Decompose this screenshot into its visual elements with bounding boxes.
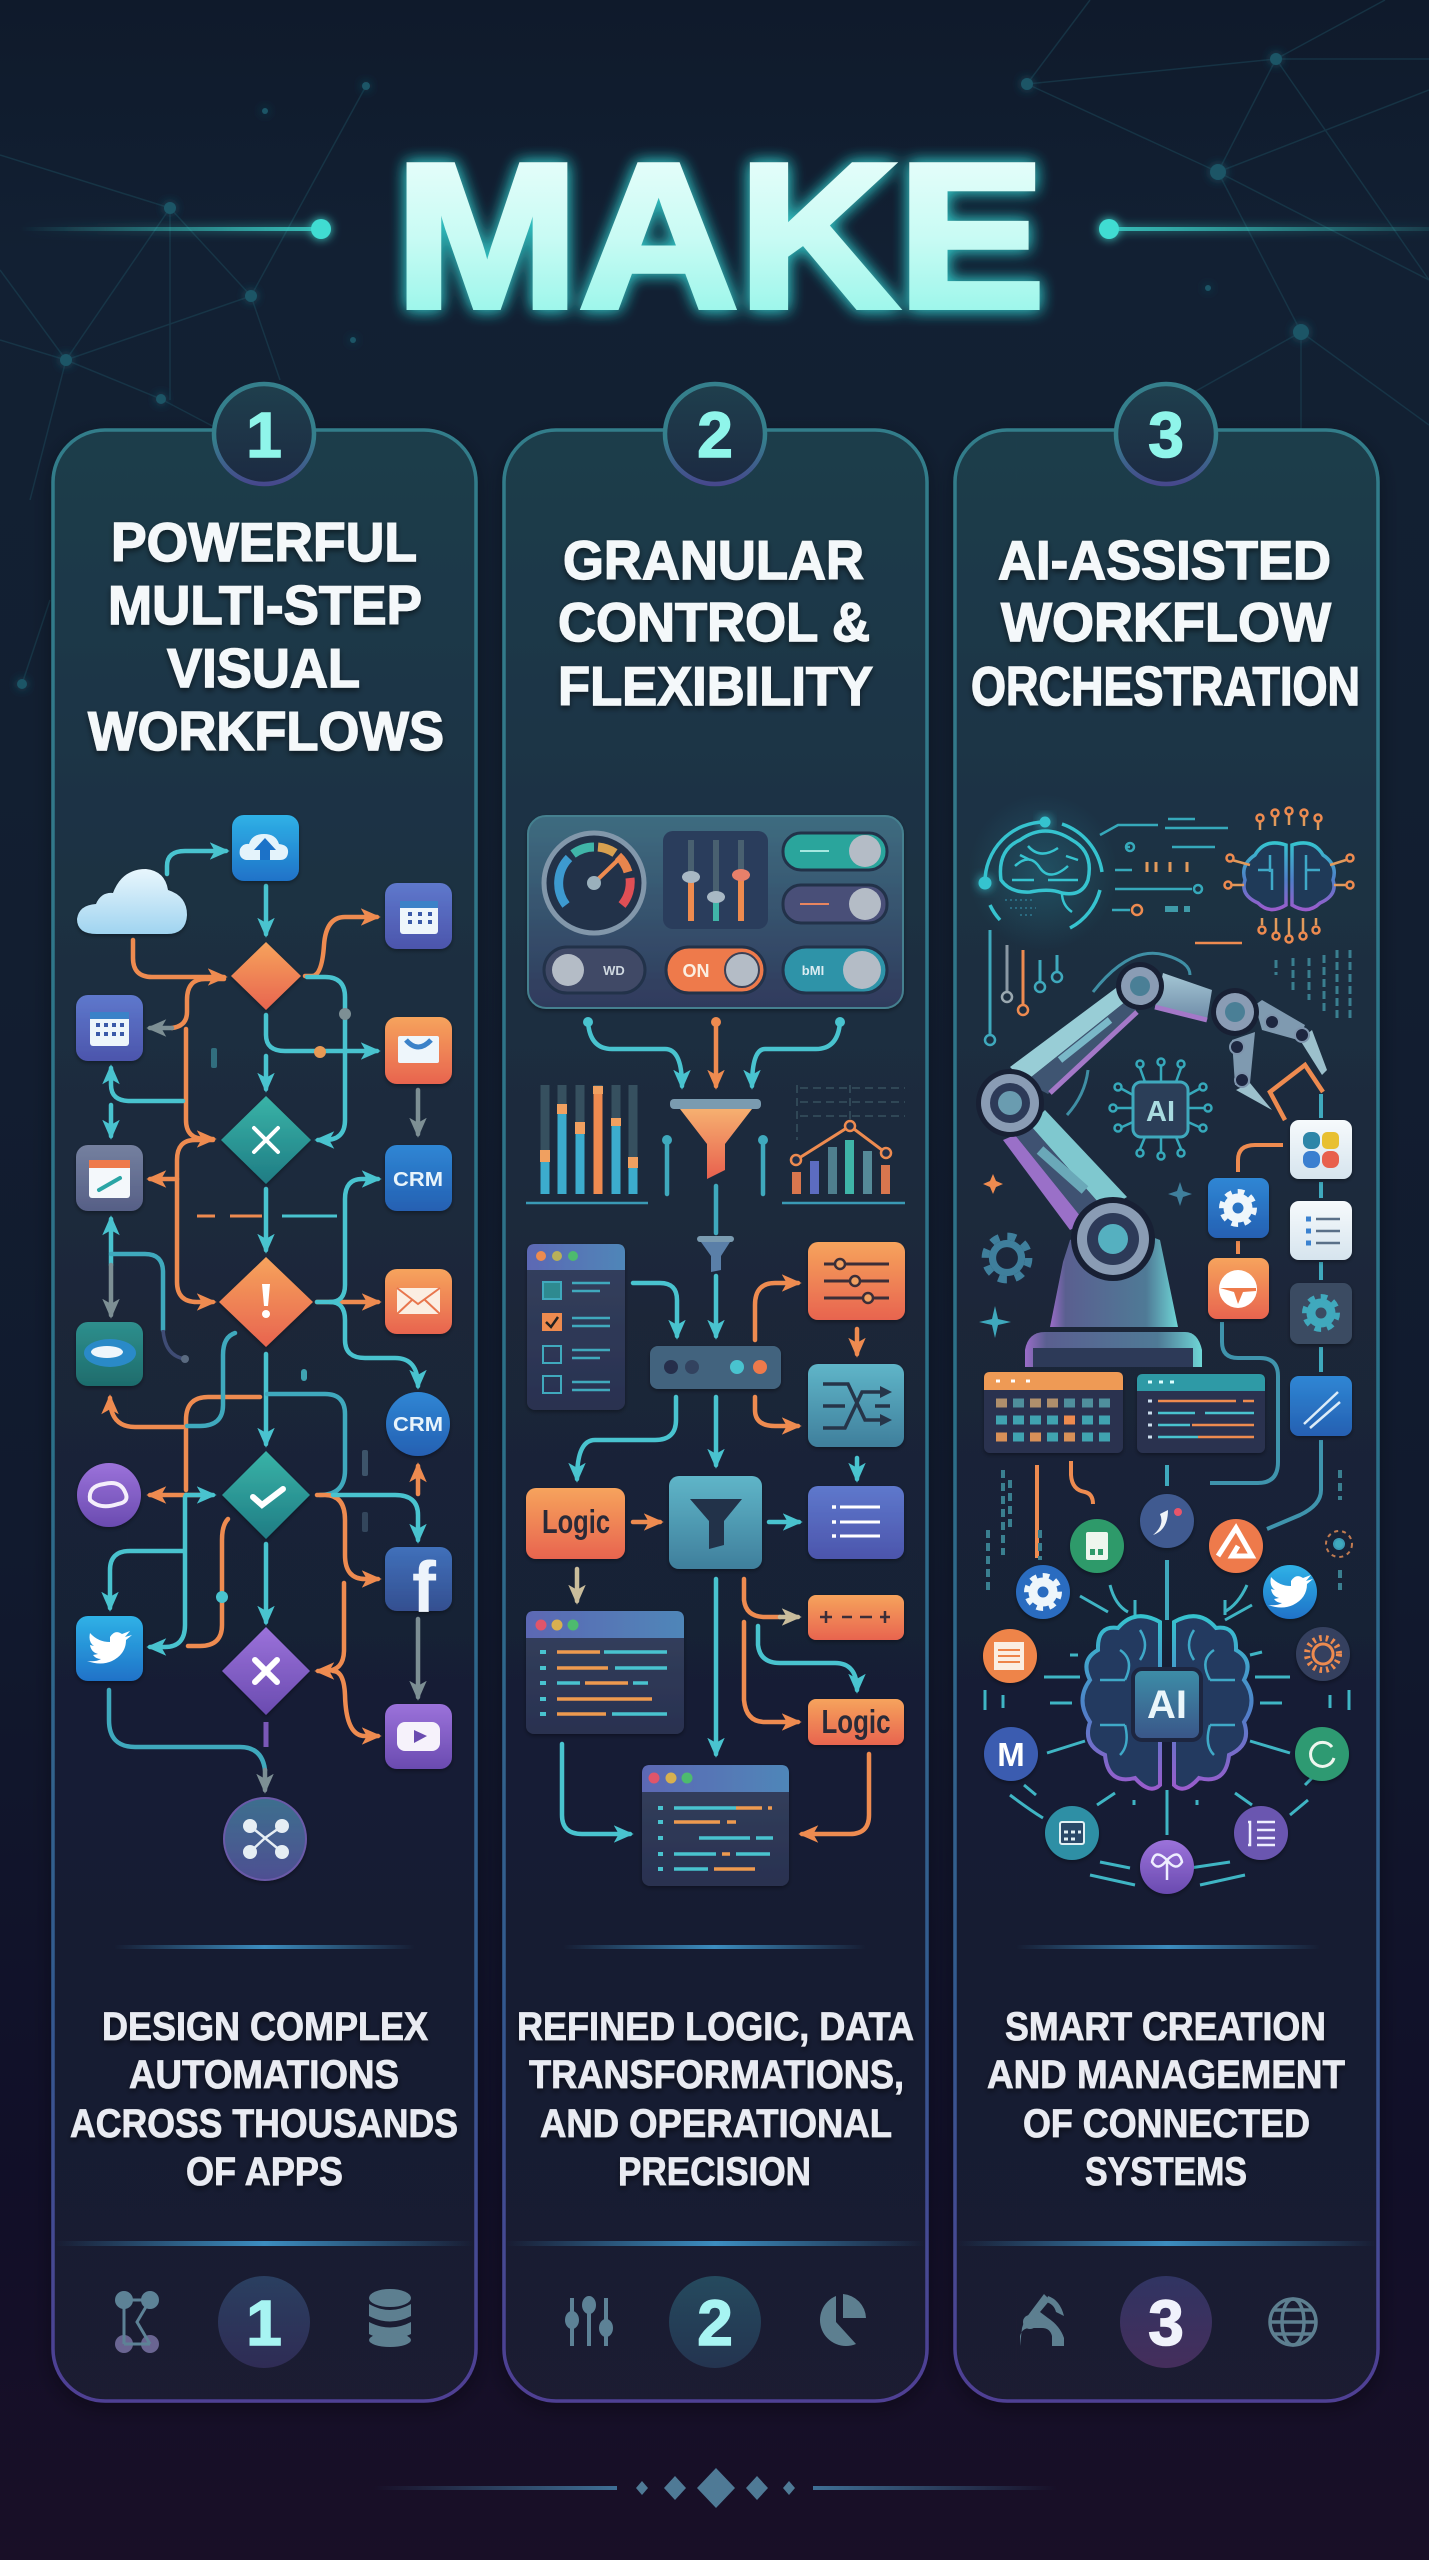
- icon: gear: [985, 1236, 1029, 1280]
- AI chip: [1110, 1058, 1212, 1160]
- background network lines: [0, 0, 1429, 684]
- card 2 number badge: 2: [697, 399, 733, 471]
- icon: CRM tile: [385, 1145, 452, 1211]
- card 2 heading: FLEXIBILITY: [558, 655, 873, 717]
- card 1 frame: [53, 430, 476, 2401]
- workflow connector arrows: [109, 851, 418, 1790]
- tile: Logic large: [526, 1488, 625, 1559]
- card 3 heading: [971, 529, 1360, 717]
- footer number 3: 3: [1148, 2287, 1184, 2359]
- gripper: [1232, 1000, 1327, 1110]
- circle: orange drive: [1209, 1519, 1263, 1573]
- icon: CRM circle: [386, 1392, 450, 1456]
- footer number 3: [1120, 2276, 1212, 2368]
- icon: mail orange: [385, 1269, 452, 1334]
- footer icon: database: [369, 2289, 411, 2347]
- panel: card 1: [53, 384, 476, 2401]
- icon: AI brain center: AI: [1147, 1683, 1187, 1727]
- bottom ornament: [374, 2468, 1057, 2508]
- node ring right: [1326, 1531, 1352, 1557]
- card 1 heading: POWERFUL: [111, 511, 417, 573]
- panel: card 2: [504, 384, 927, 2401]
- title accent: right line and dot: [1099, 219, 1429, 239]
- card 1 heading: VISUAL: [167, 637, 360, 699]
- icon: calendar edit: [76, 1145, 143, 1211]
- circle: blue gear: [1016, 1565, 1070, 1619]
- card 1 heading: [88, 511, 444, 762]
- tile: Logic large: Logic: [542, 1503, 610, 1540]
- footer number 2: 2: [697, 2287, 733, 2359]
- toggle: muted: [783, 885, 887, 923]
- footer icon: globe: [1270, 2299, 1316, 2345]
- tile: dark gear: [1290, 1283, 1352, 1344]
- toggle: ON: ON: [682, 961, 710, 981]
- card 3 heading: AI-ASSISTED: [998, 529, 1331, 591]
- bar chart: left: [526, 1085, 648, 1203]
- card 1 description: DESIGN COMPLEX: [102, 2005, 428, 2049]
- tile: white list: [1290, 1201, 1352, 1260]
- circle: green refresh: [1295, 1727, 1349, 1781]
- icon: facebook tile: [385, 1547, 452, 1628]
- funnel: large: [670, 1099, 761, 1179]
- card 2 description: REFINED LOGIC, DATA: [517, 2005, 914, 2049]
- upper arm: [1010, 985, 1137, 1094]
- footer divider: [55, 2241, 474, 2246]
- icon: teal cloud tile: [76, 1322, 143, 1386]
- circle: bird badge: [1140, 1494, 1194, 1548]
- tile: shuffle: [808, 1364, 904, 1447]
- panel: card 3: [955, 384, 1378, 2401]
- card 2 heading: [558, 529, 873, 717]
- circle: M: M: [997, 1736, 1025, 1773]
- circle: M: [984, 1727, 1038, 1781]
- card 2 description: PRECISION: [618, 2150, 811, 2194]
- card 3 description: SYSTEMS: [1085, 2150, 1247, 2194]
- toggle: WD: WD: [603, 963, 625, 978]
- icon: digital brain right: [1224, 808, 1354, 942]
- card 1 heading: MULTI-STEP: [108, 574, 422, 636]
- card 1 description: ACROSS THOUSANDS: [70, 2102, 458, 2146]
- card 2 description: [517, 2005, 914, 2194]
- circle: green sheet: [1070, 1519, 1124, 1573]
- divider: [1016, 1945, 1320, 1949]
- card 3 number badge: [1116, 384, 1216, 484]
- icon: youtube tile: [385, 1704, 452, 1769]
- icon: mail tile: [385, 1017, 452, 1084]
- circle: purple list: [1234, 1806, 1288, 1860]
- icon: AI brain center: [1082, 1616, 1252, 1789]
- tile: blue gear: [1208, 1178, 1269, 1238]
- card 3 description: OF CONNECTED: [1023, 2102, 1310, 2146]
- footer number 1: 1: [246, 2287, 282, 2359]
- tile: colorful apps: [1290, 1120, 1352, 1179]
- toggle: bMI: [783, 947, 887, 993]
- checklist window: [527, 1244, 625, 1410]
- tile: blue percent: [1290, 1376, 1352, 1436]
- connector lines: [1037, 1065, 1323, 1620]
- grid window: [984, 1372, 1123, 1453]
- combo chart: right: [782, 1085, 905, 1203]
- circuit traces: [985, 819, 1350, 1045]
- card 2 description: TRANSFORMATIONS,: [529, 2053, 904, 2097]
- card 2 description: AND OPERATIONAL: [540, 2102, 892, 2146]
- icon: facebook tile: f: [412, 1548, 437, 1628]
- data dashes: [988, 1470, 1340, 1590]
- divider: [563, 1945, 866, 1949]
- footer icon: sliders: [565, 2296, 613, 2346]
- decision diamond: teal check: [222, 1451, 310, 1539]
- title: MAKE: MAKE: [395, 121, 1045, 351]
- decision diamond: orange alert: [219, 1257, 313, 1347]
- card 1 heading: WORKFLOWS: [88, 700, 444, 762]
- sparkles: [979, 1174, 1192, 1338]
- circle: orange doc: [983, 1629, 1037, 1683]
- icon: digital brain left: [968, 794, 1118, 950]
- toggle: ON: [666, 947, 765, 993]
- footer divider: [957, 2241, 1376, 2246]
- circle: twitter: [1263, 1565, 1317, 1619]
- footer divider: [506, 2241, 925, 2246]
- card 2 frame: [504, 430, 927, 2401]
- arm body: [1050, 1230, 1178, 1327]
- circle: teal calendar: [1045, 1806, 1099, 1860]
- card 2 heading: CONTROL &: [558, 591, 870, 653]
- card 2 heading: GRANULAR: [563, 529, 864, 591]
- decision diamond: purple cross: [222, 1627, 310, 1715]
- gauge: [544, 833, 644, 933]
- tile: plus minus: [808, 1595, 904, 1640]
- code window: bottom: [642, 1765, 789, 1886]
- decision diamond: orange top: [231, 942, 301, 1010]
- decision diamond: teal shuffle: [221, 1096, 311, 1184]
- footer icon: branch nodes: [115, 2291, 159, 2353]
- circle: purple flower: [1140, 1840, 1194, 1894]
- card 3 heading: WORKFLOW: [1001, 591, 1331, 653]
- funnel: small: [697, 1236, 734, 1272]
- icon: upload tile: [232, 815, 299, 881]
- toggle: WD: [544, 947, 645, 993]
- circle: dark sun: [1296, 1627, 1350, 1681]
- card 2 number badge: [665, 384, 765, 484]
- card 3 frame: [955, 430, 1378, 2401]
- footer icon: robot arm: [1020, 2294, 1064, 2346]
- icon: calendar right: [385, 883, 452, 949]
- tile: Logic small: Logic: [822, 1703, 890, 1740]
- icon: twitter tile: [76, 1616, 143, 1681]
- card 1 description: AUTOMATIONS: [129, 2053, 399, 2097]
- icon: purple brain circle: [77, 1463, 141, 1527]
- tile: orange star: [1208, 1258, 1269, 1319]
- title accent: left line and dot: [20, 219, 331, 239]
- icon: calendar left: [76, 995, 143, 1061]
- icon: cloud: [77, 869, 187, 934]
- tile: filter: [669, 1476, 762, 1569]
- icon: hub node circle: [224, 1798, 306, 1880]
- background network nodes: [17, 53, 1309, 689]
- control panel: [528, 816, 903, 1008]
- card 3 description: AND MANAGEMENT: [987, 2053, 1345, 2097]
- joints: [976, 962, 1309, 1281]
- card 1 description: [70, 2005, 458, 2194]
- sliders: [663, 831, 768, 929]
- arm base: [1025, 1332, 1202, 1367]
- icon: CRM tile: CRM: [393, 1169, 443, 1191]
- AI chip: AI: [1146, 1096, 1175, 1128]
- tile: list: [808, 1486, 904, 1559]
- card 3 number badge: 3: [1148, 399, 1184, 471]
- code window: left: [526, 1611, 684, 1734]
- card 3 description: [987, 2005, 1345, 2194]
- card 1 number badge: 1: [246, 399, 282, 471]
- spokes around AI brain: [985, 1585, 1349, 1885]
- connector arrows: [562, 1017, 869, 1834]
- card 1 description: OF APPS: [186, 2150, 343, 2194]
- code window: [1137, 1374, 1265, 1453]
- footer icon: pie chart: [820, 2294, 866, 2346]
- lower arm: [1003, 1110, 1127, 1230]
- server bar: [650, 1346, 781, 1389]
- card 3 description: SMART CREATION: [1005, 2005, 1326, 2049]
- tile: Logic small: [808, 1699, 904, 1745]
- divider: [114, 1945, 415, 1949]
- forearm: [1155, 973, 1212, 1020]
- app circles: [983, 1494, 1350, 1894]
- tile: orange sliders: [808, 1242, 905, 1320]
- card 1 number badge: [214, 384, 314, 484]
- arcs behind arm: [1067, 953, 1190, 1115]
- toggle: teal: [783, 833, 887, 870]
- toggle: bMI: bMI: [802, 963, 824, 978]
- footer number 1: [218, 2276, 310, 2368]
- icon: CRM circle: CRM: [393, 1414, 443, 1436]
- robot arm: [976, 953, 1327, 1367]
- footer number 2: [669, 2276, 761, 2368]
